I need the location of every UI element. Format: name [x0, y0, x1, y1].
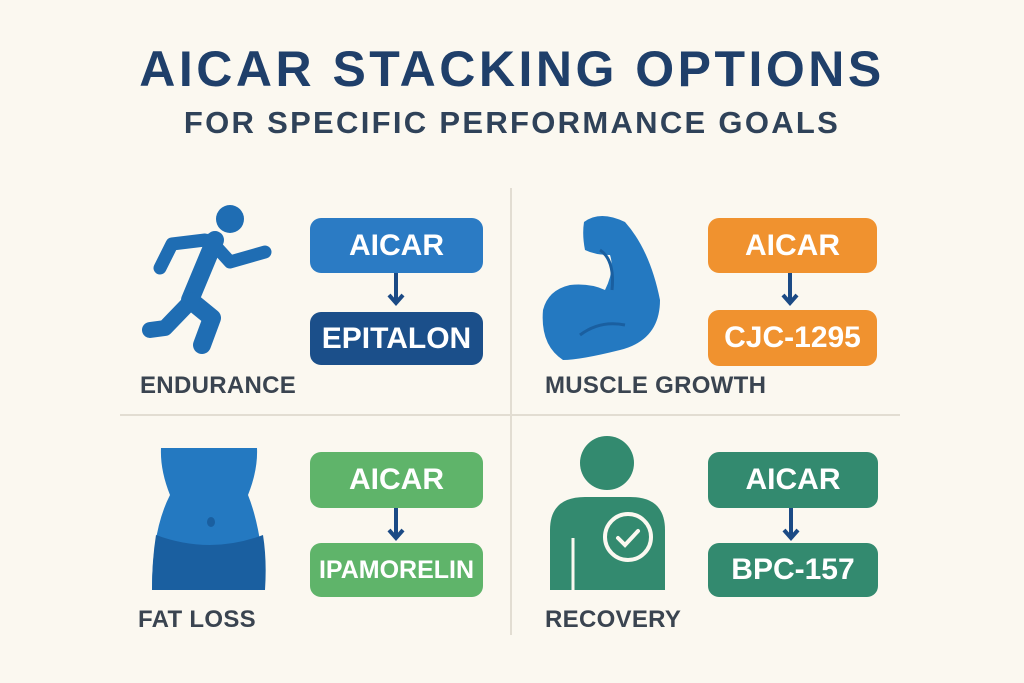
arrow [782, 508, 800, 541]
box: IPAMORELIN [310, 543, 483, 597]
label: FAT LOSS [138, 606, 256, 633]
icon: person with check [550, 436, 665, 590]
panel: endurance [140, 205, 483, 399]
arrow [388, 508, 404, 541]
icon: arm [542, 216, 660, 360]
box: AICAR [310, 218, 483, 273]
label: RECOVERY [545, 606, 681, 633]
panel: fat loss [138, 448, 483, 633]
panel: muscle growth [542, 216, 877, 399]
icon: runner [142, 205, 272, 354]
box: EPITALON [310, 312, 483, 365]
box: AICAR [708, 452, 878, 508]
box: AICAR: AICAR [746, 463, 840, 496]
box: EPITALON: EPITALON [322, 322, 471, 354]
box: AICAR [708, 218, 877, 273]
label: ENDURANCE [140, 372, 296, 399]
arrow [782, 273, 798, 306]
box: BPC-157: BPC-157 [731, 553, 855, 586]
box: AICAR: AICAR [745, 228, 840, 262]
box: CJC-1295: CJC-1295 [724, 321, 861, 354]
box: AICAR: AICAR [349, 463, 444, 496]
box: AICAR [310, 452, 483, 508]
box: IPAMORELIN: IPAMORELIN [319, 556, 474, 584]
title: AICAR STACKING OPTIONS [139, 41, 885, 97]
box: BPC-157 [708, 543, 878, 597]
box: CJC-1295 [708, 310, 877, 366]
label: MUSCLE GROWTH [545, 372, 766, 399]
box: AICAR: AICAR [349, 228, 444, 262]
panel: recovery [545, 436, 878, 633]
subtitle: FOR SPECIFIC PERFORMANCE GOALS [184, 105, 840, 140]
icon: torso [152, 448, 266, 590]
arrow [388, 273, 404, 306]
